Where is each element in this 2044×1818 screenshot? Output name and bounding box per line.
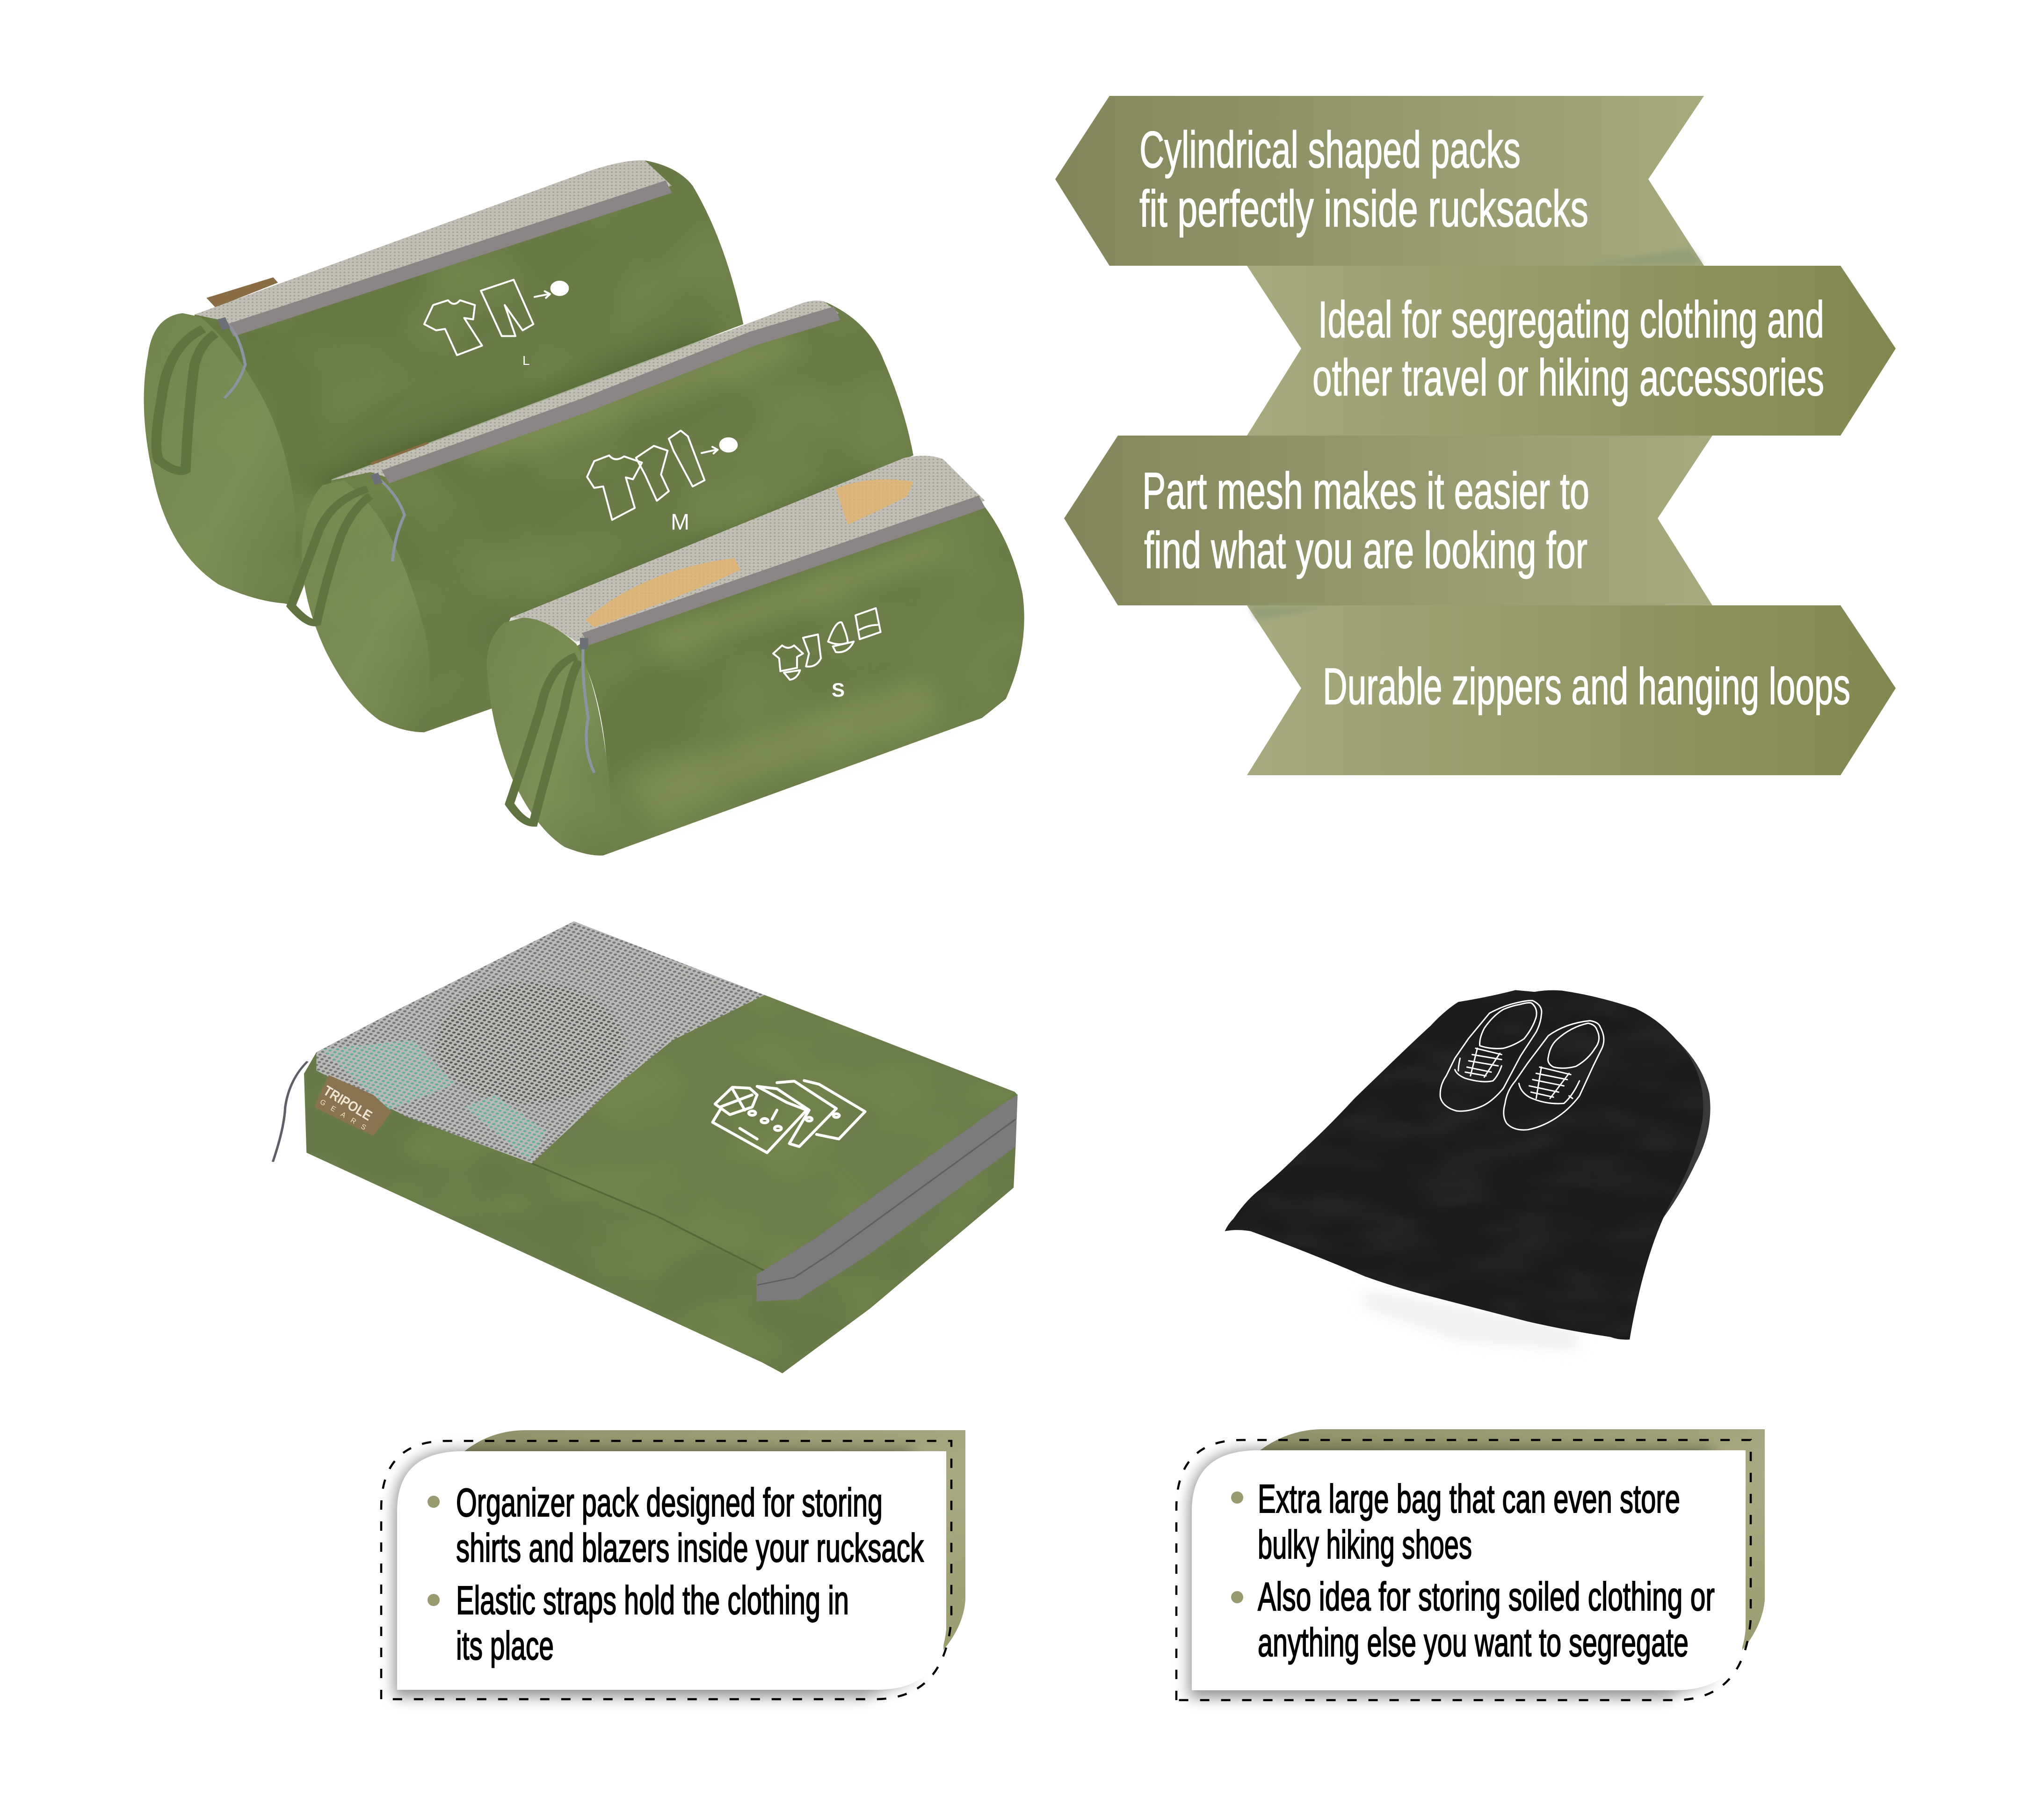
- brand name: TRIPOLE: [320, 1083, 375, 1124]
- mesh overlay: [316, 922, 765, 1164]
- size label M: M: [671, 510, 689, 535]
- bullet text 1: Organizer pack designed for storing: [456, 1481, 883, 1525]
- panel: shoe bag callout: [1176, 1429, 1765, 1700]
- chevron text 1: fit perfectly inside rucksacks: [1139, 180, 1588, 238]
- zipper band: [757, 1095, 1018, 1302]
- chevron text 1: Cylindrical shaped packs: [1139, 121, 1521, 179]
- chevron 1: [1055, 96, 1704, 266]
- card shadow: [1189, 1449, 1712, 1698]
- bullet text 1: bulky hiking shoes: [1258, 1523, 1472, 1567]
- icon: folded shirts: [712, 1081, 865, 1153]
- bullet 2: [428, 1594, 440, 1606]
- pack silhouette and side panels: [304, 922, 1018, 1374]
- brand tag: [314, 1075, 391, 1136]
- white card: [397, 1451, 946, 1690]
- bullet text 1: Extra large bag that can even store: [1258, 1477, 1680, 1521]
- chevron 3: [1064, 436, 1712, 605]
- bullet text 2: anything else you want to segregate: [1258, 1621, 1689, 1665]
- zipper teeth line: [757, 1119, 1015, 1285]
- card shadow: [394, 1450, 912, 1697]
- mint clothing seen through mesh: [321, 1040, 455, 1110]
- olive backing: [1260, 1429, 1765, 1650]
- size label S: S: [832, 679, 845, 701]
- bullet 1: [428, 1496, 440, 1508]
- chevron text 2: other travel or hiking accessories: [1312, 349, 1824, 407]
- faint shadow below bag: [1365, 1289, 1580, 1352]
- panel: feature chevrons: [1055, 96, 1896, 775]
- mint clothing lower: [465, 1095, 547, 1160]
- icon: pair of shoes: [1440, 1001, 1604, 1130]
- dashed outline: [1176, 1440, 1751, 1700]
- bullet text 2: its place: [456, 1624, 554, 1668]
- bullet text 2: Also idea for storing soiled clothing or: [1258, 1575, 1715, 1619]
- bag M: [291, 300, 913, 732]
- bullet 2: [1231, 1591, 1243, 1603]
- top panel fold shadow: [532, 1164, 765, 1271]
- icon: small accessories on S: [773, 608, 881, 680]
- top green panel: [532, 995, 1015, 1271]
- photo: black shoe bag: [1225, 990, 1711, 1352]
- bag S: [487, 456, 1024, 856]
- dashed outline: [381, 1441, 951, 1699]
- size label L: L: [522, 353, 530, 368]
- mesh window base: [316, 922, 765, 1164]
- brand sub-name: GEARS: [319, 1098, 368, 1132]
- bullet text 1: shirts and blazers inside your rucksack: [456, 1526, 924, 1571]
- icon: shirts and roll on M: [587, 430, 737, 520]
- chevron text 3: Part mesh makes it easier to: [1142, 462, 1589, 520]
- bag L: [144, 160, 743, 606]
- chevron text 3: find what you are looking for: [1144, 522, 1587, 579]
- bullet text 2: Elastic straps hold the clothing in: [456, 1578, 849, 1623]
- olive backing: [464, 1430, 965, 1650]
- zipper cord: [273, 1062, 307, 1162]
- brand label: [319, 1083, 375, 1132]
- photo: three cylindrical packs L, M, S: [144, 160, 1024, 856]
- white card: [1192, 1450, 1746, 1690]
- bag edge: [1610, 1031, 1711, 1339]
- icon: t-shirt, trousers and arrow on L: [424, 280, 568, 355]
- panel: organizer pack callout: [381, 1430, 965, 1699]
- photo: flat organizer pack: [273, 922, 1018, 1374]
- chevron 4: [1247, 605, 1896, 775]
- chevron 2: [1247, 266, 1896, 436]
- darker garment behind mesh: [435, 982, 623, 1104]
- bullet 1: [1231, 1491, 1243, 1504]
- bag body: [1225, 990, 1703, 1339]
